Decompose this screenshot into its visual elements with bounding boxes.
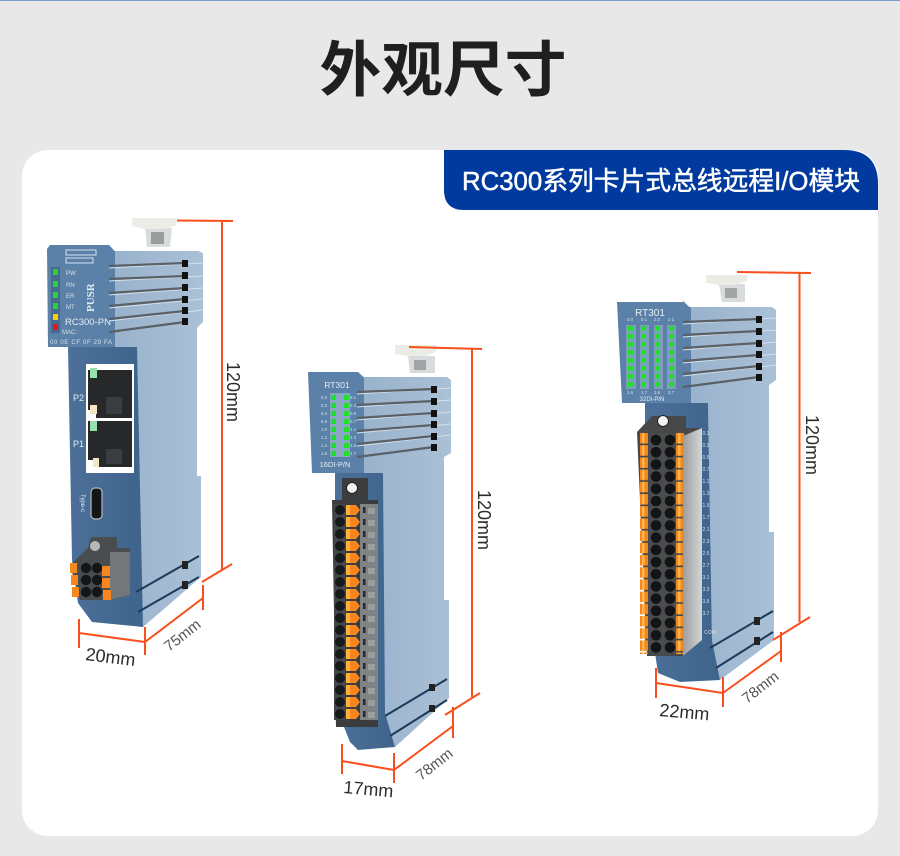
dimension: 32DI 120mm [737, 272, 822, 640]
top accent line [0, 0, 900, 1]
front body [68, 347, 143, 627]
lower rail slots [385, 679, 447, 736]
dimension: 32DI 22mm: 22mm [659, 700, 710, 724]
terminal block [332, 478, 378, 727]
channel labels: 0.0 [321, 395, 328, 400]
channel labels: 1.0 [321, 427, 328, 432]
port labels [73, 393, 84, 449]
LED labels [66, 271, 76, 311]
title: 外观尺寸 [320, 22, 566, 109]
panel: white card [22, 150, 878, 836]
dimension: 32DI 22mm [656, 668, 723, 724]
dimension: gateway 120mm [177, 220, 243, 582]
lower rail slots [710, 611, 773, 668]
MAC label: 00 0E CF 0F 29 FA [50, 340, 112, 346]
channel labels [321, 395, 357, 456]
channel group labels: 3.6 [654, 390, 661, 395]
channel labels: 1.5 [350, 443, 357, 448]
dimension: gateway 120mm: 120mm [223, 362, 243, 422]
channel labels: 1.4 [321, 443, 328, 448]
LED strips [626, 325, 676, 389]
terminal labels [703, 431, 716, 636]
dimension: gateway 20mm: 20mm [85, 644, 137, 670]
channel labels: 0.3 [350, 403, 357, 408]
dimension: 16DI 78mm [394, 707, 456, 784]
terminal labels: 1.7 [703, 515, 710, 521]
terminal labels: 3.7 [703, 611, 710, 617]
device: RT301 32DI module [617, 275, 776, 682]
terminal labels: 3.3 [703, 587, 710, 593]
channel group labels: 2.1 [668, 317, 675, 322]
terminal labels: 2.3 [703, 539, 710, 545]
front body [335, 473, 395, 750]
side housing [109, 245, 203, 627]
dimension: 16DI 17mm [342, 744, 394, 801]
terminal labels: 0.3 [703, 443, 710, 449]
terminal labels: 2.7 [703, 563, 710, 569]
side housing [683, 300, 776, 680]
channel group labels: 1.6 [627, 390, 634, 395]
LEDs [331, 395, 349, 456]
terminal labels: 3.1 [703, 575, 710, 581]
terminal labels: COM [704, 630, 716, 636]
terminal block [637, 416, 702, 656]
dimension: gateway 75mm [145, 585, 204, 655]
series badge [444, 150, 878, 210]
MAC label: MAC: [62, 330, 77, 336]
model label: 16DI-P/N [320, 460, 350, 469]
terminal labels: 2.5 [703, 551, 710, 557]
channel labels: 0.4 [321, 411, 328, 416]
channel labels: 1.7 [350, 451, 357, 456]
power connector [70, 537, 130, 600]
ethernet ports [86, 364, 134, 473]
vent slats [109, 260, 203, 332]
LED labels: MT [66, 305, 75, 311]
vent slats [357, 386, 451, 457]
MAC label [50, 330, 112, 346]
clip latch [132, 218, 177, 247]
head panel [617, 302, 691, 403]
channel labels: 1.6 [321, 451, 328, 456]
channel labels: 0.1 [350, 395, 357, 400]
module label: RT301 [635, 308, 665, 319]
port labels: P2 [73, 393, 84, 403]
terminal labels: 1.3 [703, 491, 710, 497]
channel group labels: 0.0 [627, 317, 634, 322]
head panel [47, 245, 115, 347]
dimension: 16DI 78mm: 78mm [413, 745, 456, 784]
USB Type-C port: Type-c [79, 494, 85, 512]
terminal labels: 0.1 [703, 431, 710, 437]
terminal labels: 1.5 [703, 503, 710, 509]
USB Type-C port [79, 488, 102, 519]
lower rail slots [136, 556, 199, 612]
brand logo [66, 250, 96, 263]
port labels: P1 [73, 439, 84, 449]
LEDs [628, 326, 674, 387]
channel group labels [627, 317, 675, 395]
channel group labels: 0.1 [641, 317, 648, 322]
terminal labels: 3.5 [703, 599, 710, 605]
dimension: 16DI 17mm: 17mm [343, 777, 394, 801]
channel group labels: 3.7 [668, 390, 675, 395]
series badge: RC300系列卡片式总线远程I/O模块 [462, 166, 860, 196]
status LEDs [51, 267, 60, 333]
device: RC300-PN gateway [47, 218, 203, 627]
channel group labels: 1.7 [641, 390, 648, 395]
terminal labels: 0.7 [703, 467, 710, 473]
channel labels: 0.5 [350, 411, 357, 416]
terminal labels: 1.1 [703, 479, 710, 485]
LED labels: PW [66, 271, 76, 277]
head panel [308, 372, 364, 473]
module label: RT301 [324, 380, 350, 390]
dimension: gateway 20mm [79, 619, 145, 670]
terminal labels: 2.1 [703, 527, 710, 533]
terminal labels: 0.5 [703, 455, 710, 461]
LED labels: ER [66, 294, 75, 300]
device: RT301 16DI module [308, 345, 451, 750]
channel labels: 1.3 [350, 435, 357, 440]
LED labels: RN [66, 283, 75, 289]
channel labels: 1.1 [350, 427, 357, 432]
model label: RC300-PN [65, 317, 111, 328]
dimension: gateway 75mm: 75mm [161, 616, 204, 655]
dimension: 32DI 78mm: 78mm [739, 668, 782, 707]
dimension: 16DI 120mm [409, 347, 494, 715]
vent slats [683, 316, 776, 387]
clip latch [395, 345, 437, 373]
channel labels: 0.7 [350, 419, 357, 424]
channel labels: 1.2 [321, 435, 328, 440]
dimension: 16DI 120mm: 120mm [474, 490, 494, 550]
PUSR logo: PUSR [85, 282, 97, 312]
dimension: 32DI 78mm [723, 632, 782, 707]
channel labels: 0.2 [321, 403, 328, 408]
channel labels: 0.6 [321, 419, 328, 424]
dimension: 32DI 120mm: 120mm [802, 415, 822, 475]
model label: 32DI-P/N [640, 397, 664, 403]
channel group labels: 2.0 [654, 317, 661, 322]
side housing [358, 372, 451, 747]
clip latch [706, 275, 748, 302]
front body [645, 403, 720, 682]
